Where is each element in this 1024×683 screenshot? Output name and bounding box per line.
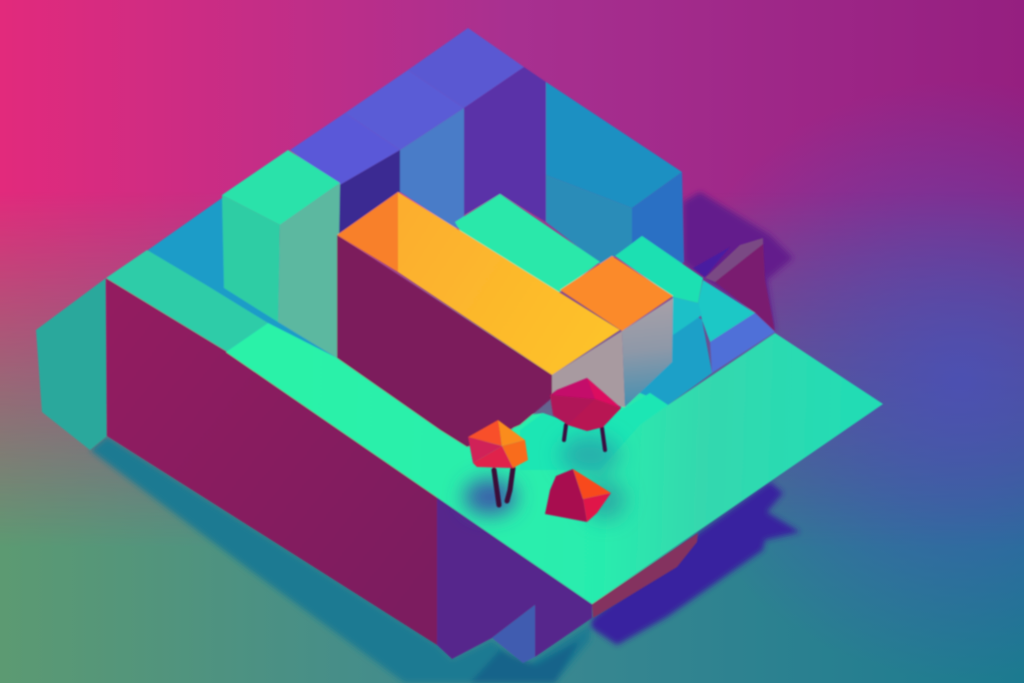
block: front purple wall [437, 497, 592, 659]
figure shadows on floor [464, 435, 625, 520]
block: back column sides [338, 67, 546, 236]
block: orange cube [552, 256, 673, 407]
cast shadows [90, 192, 800, 683]
block: right teal and cyan strips [615, 236, 775, 410]
figure: folded umbrella on ground [545, 469, 611, 522]
figure: back umbrella with legs [550, 378, 621, 450]
green bump behind figures [520, 393, 668, 470]
shadow wall details right [693, 238, 775, 332]
red underside of floor [592, 533, 698, 618]
block: far blue-cyan strip [148, 198, 340, 360]
block: back green slab [455, 194, 600, 300]
block: teal strip on front left [106, 250, 268, 352]
floor: bright green walkway [226, 323, 883, 604]
block: blue right tower [546, 82, 684, 282]
block: blue inset under purple wall [492, 605, 535, 663]
block: back blue top steps [290, 28, 524, 186]
block: left end teal face [36, 278, 107, 450]
figure: front umbrella with legs [468, 420, 528, 505]
block: orange and yellow long block [337, 192, 620, 447]
block: green tower [222, 150, 340, 358]
block: front maroon wall [106, 278, 437, 645]
